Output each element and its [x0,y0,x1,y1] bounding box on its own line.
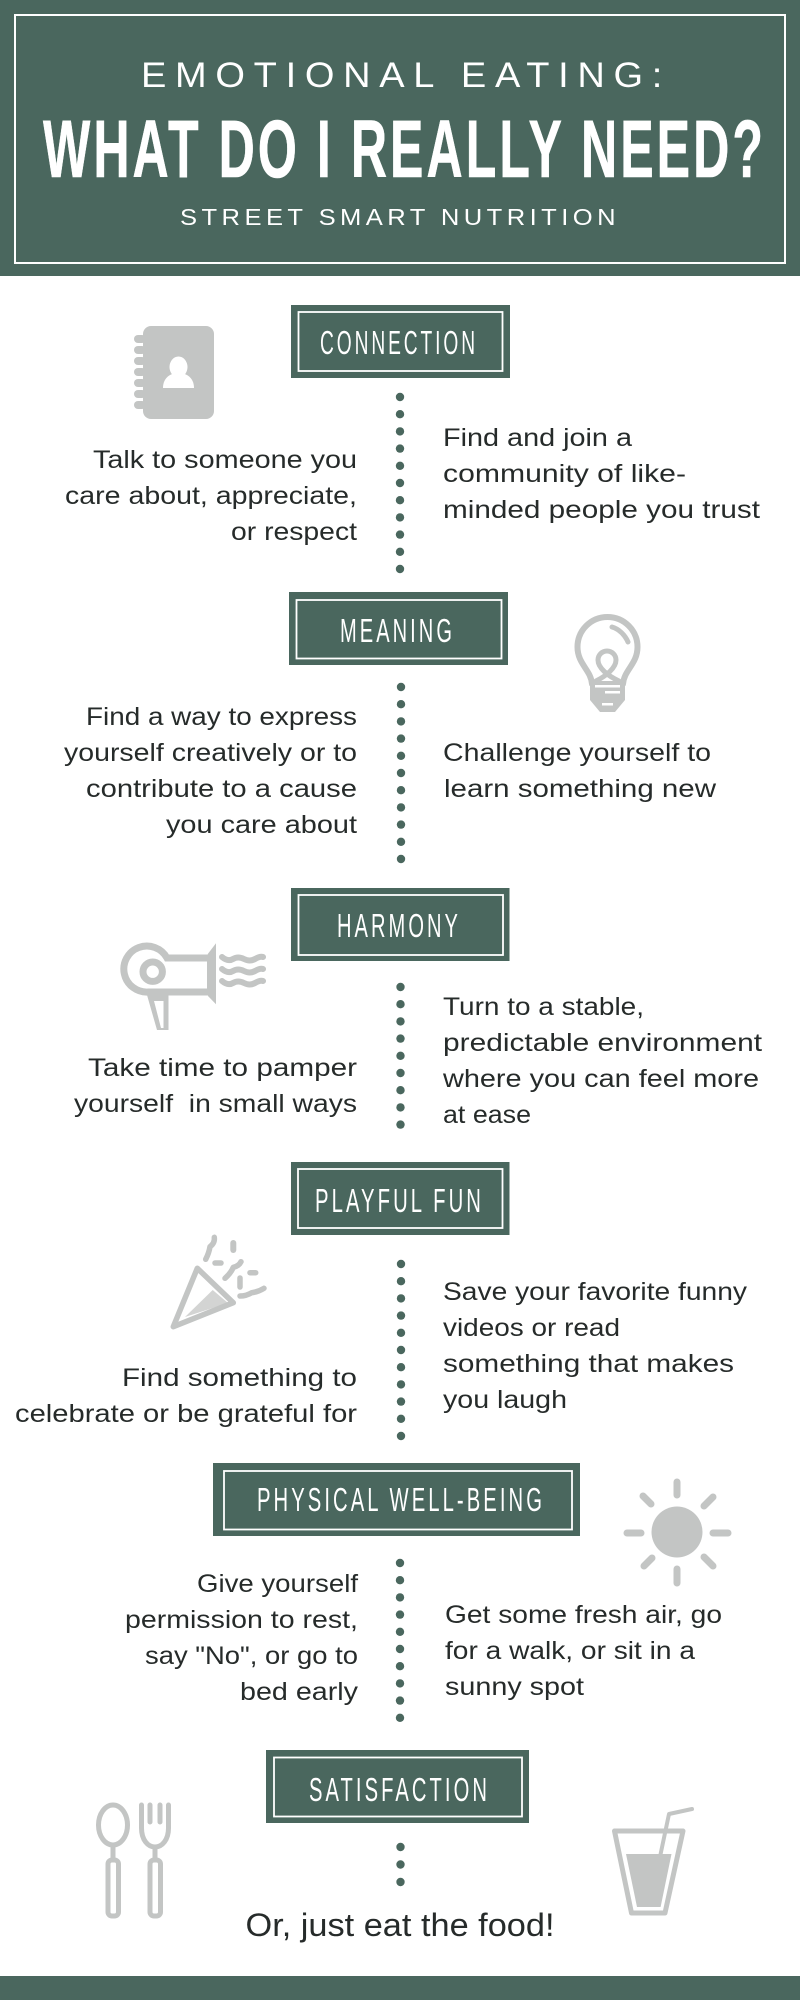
text: find and join [443,424,760,524]
text: talk to someone: Talk to someone you [93,446,357,474]
dotted divider [396,983,405,1129]
header banner [0,0,800,276]
panel: meaning [64,592,717,863]
text: pamper yourself [74,1054,357,1118]
text: funny videos: something that makes [443,1350,734,1378]
heading: playful fun [291,1162,510,1235]
heading: meaning [289,592,508,665]
heading: satisfaction: SATISFACTION [309,1771,490,1808]
text: talk to someone [65,446,357,546]
dotted divider [397,1260,405,1440]
text: find and join: community of like- [443,460,686,488]
dotted divider [397,683,405,863]
text: pamper yourself: yourself in small ways [74,1090,357,1118]
text: stable environment [442,993,762,1129]
text: fresh air: for a walk, or sit in a [445,1637,695,1665]
dotted divider [396,1559,404,1722]
text: fresh air: Get some fresh air, go [445,1601,722,1629]
text: express yourself: Find a way to express [86,703,357,731]
text: express yourself: you care about [166,811,357,839]
dotted divider [396,393,404,573]
text: just eat the food: Or, just eat the food! [246,1907,554,1943]
text: express yourself: contribute to a cause [86,775,357,803]
icon: address book [134,326,214,419]
panel: satisfaction [98,1750,692,1943]
heading: physical well-being: PHYSICAL WELL-BEING [257,1481,545,1518]
heading: connection [291,305,510,378]
text: talk to someone: or respect [231,518,357,546]
icon: sun [627,1482,728,1583]
text: funny videos: you laugh [443,1386,567,1414]
heading: connection: CONNECTION [320,324,478,361]
text: funny videos: Save your favorite funny [443,1278,748,1306]
text: funny videos: videos or read [443,1314,620,1342]
heading: harmony [291,888,510,961]
text: stable environment: Turn to a stable, [443,993,644,1021]
text: talk to someone: care about, appreciate, [65,482,357,510]
text: stable environment: predictable environment [443,1029,762,1057]
text: celebrate: celebrate or be grateful for [15,1400,357,1428]
text: find and join: Find and join a [443,424,632,452]
icon: party popper [173,1237,264,1327]
text: find and join: minded people you trust [443,496,760,524]
text: pamper yourself: Take time to pamper [88,1054,357,1082]
icon: spoon and fork [98,1805,168,1916]
text: fresh air [445,1601,722,1701]
panel: connection [65,305,760,573]
icon: drink with straw [614,1809,692,1913]
footer bar [0,1976,800,2000]
icon: light bulb [578,617,638,712]
title: emotional eating: EMOTIONAL EATING: [141,56,671,95]
heading: physical well-being [213,1463,580,1536]
text: challenge yourself: Challenge yourself to [443,739,711,767]
text: express yourself [64,703,357,839]
heading: satisfaction [266,1750,529,1823]
text: fresh air: sunny spot [445,1673,584,1701]
text: express yourself: yourself creatively or to [64,739,357,767]
text: challenge yourself: learn something new [444,775,717,803]
text: permission to rest: permission to rest, [125,1606,358,1634]
text: celebrate [15,1364,357,1428]
panel: playful fun [15,1162,748,1440]
text: celebrate: Find something to [122,1364,357,1392]
text: stable environment: where you can feel more [442,1065,759,1093]
dotted divider [396,1843,405,1886]
heading: playful fun: PLAYFUL FUN [315,1182,484,1219]
panel: physical well-being [125,1463,728,1722]
icon: hair dryer [124,943,263,1030]
text: challenge yourself [443,739,717,803]
heading: meaning: MEANING [340,612,455,649]
text: permission to rest: say "No", or go to [145,1642,358,1670]
heading: harmony: HARMONY [337,907,461,944]
text: permission to rest: bed early [240,1678,359,1706]
text: permission to rest: Give yourself [197,1570,358,1598]
panel: harmony [74,888,762,1129]
text: permission to rest [125,1570,359,1706]
subtitle: street smart nutrition: STREET SMART NUTRITION [180,204,620,230]
text: stable environment: at ease [443,1101,531,1129]
text: funny videos [443,1278,748,1414]
